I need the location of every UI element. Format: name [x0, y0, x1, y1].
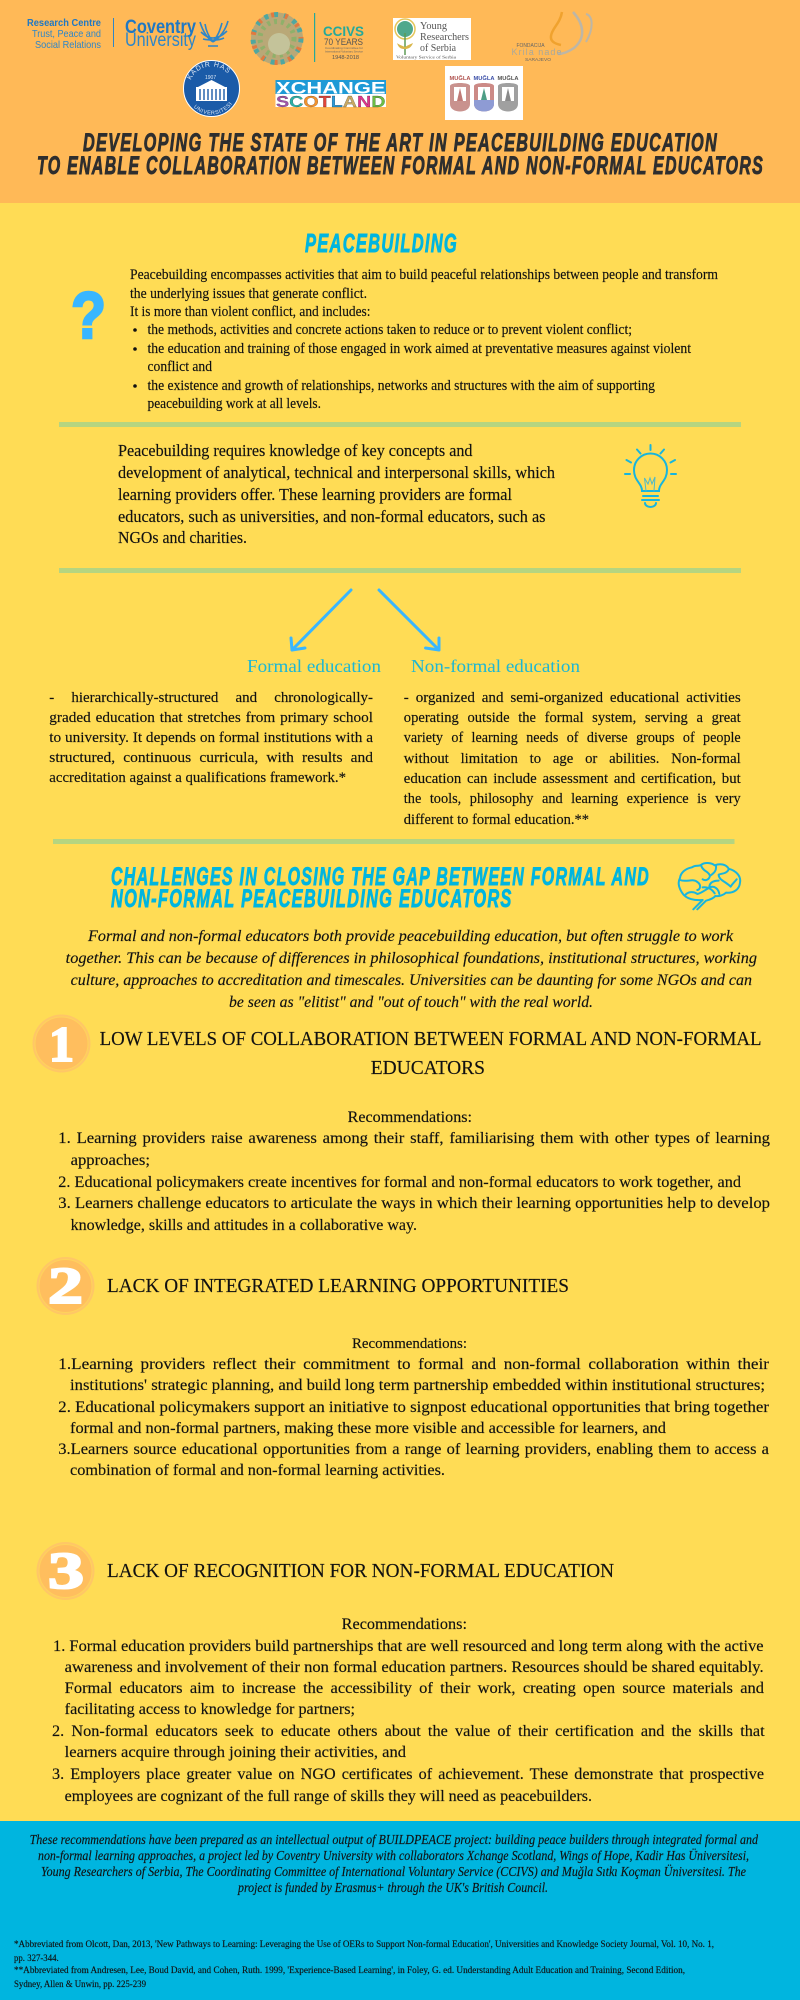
- list: recommendations 3: [52, 1638, 765, 1805]
- subheading: recommendations 3: Recommendations:: [342, 1616, 467, 1633]
- list: recommendations 1: 3. Learners challenge educators to articulate the ways in which their learning opportunities help to develop: [58, 1195, 770, 1212]
- text block: non-formal education description: variety of learning needs of diverse groups of people: [404, 730, 741, 746]
- text block: learning providers: NGOs and charities.: [118, 528, 247, 547]
- text block: definition: the methods, activities and concrete actions taken to reduce or to prevent violent conflict;: [148, 322, 632, 338]
- title: [37, 129, 764, 180]
- list: recommendations 3: 3. Employers place greater value on NGO certificates of achievement. These demonstrate that prospective: [52, 1766, 764, 1783]
- panel: footer: [0, 1821, 800, 2000]
- logo: Coventry University research centre: Trust, Peace and: [32, 28, 101, 40]
- logo: Young Researchers of Serbia: of Serbia: [420, 42, 456, 54]
- text block: non-formal education description: the tools, philosophy and learning experience is very: [404, 791, 741, 807]
- text block: definition: It is more than violent conflict, and includes:: [130, 304, 370, 320]
- list: recommendations 3: learners acquire through joining their activities, and: [65, 1744, 406, 1761]
- panel: challenge 1: [32, 1014, 770, 1234]
- list: recommendations 3: facilitating access to knowledge for partners;: [65, 1701, 355, 1718]
- text block: references: [14, 1939, 714, 1990]
- badge: number 2: 2: [48, 1258, 83, 1315]
- heading: challenge 1: LOW LEVELS OF COLLABORATION BETWEEN FORMAL AND NON-FORMAL: [100, 1028, 762, 1050]
- logo: Young Researchers of Serbia: Voluntary Service of Serbia: [396, 54, 456, 60]
- subheading: recommendations 1: Recommendations:: [348, 1109, 472, 1126]
- text block: definition: the education and training of those engaged in work aimed at preventative measures against violent: [148, 341, 691, 357]
- list: recommendations 2: institutions' strategic planning, and build long term partnership embedded within institutional structures;: [70, 1377, 765, 1394]
- list: recommendations 3: 2. Non-formal educators seek to educate others about the value of their certification and the skills that: [52, 1723, 765, 1740]
- panel: peacebuilding definition: [71, 228, 719, 412]
- text block: non-formal education description: different to formal education.**: [404, 812, 589, 828]
- list: recommendations 2: combination of formal and non-formal learning activities.: [70, 1462, 445, 1479]
- logo: Mugla: MUĞLA: [474, 74, 495, 82]
- text block: references: Sydney, Allen & Unwin, pp. 225-239: [14, 1980, 146, 1990]
- text block: non-formal education description: operating outside the formal system, serving a great: [404, 710, 741, 726]
- text block: definition: the underlying issues that generate conflict.: [130, 286, 367, 302]
- text block: learning providers: Peacebuilding requires knowledge of key concepts and: [118, 441, 473, 460]
- text block: learning providers: development of analytical, technical and interpersonal skills, which: [118, 463, 556, 482]
- logo: Mugla: [445, 66, 523, 120]
- text block: challenges intro: culture, approaches to accreditation and timescales. Universities can be daunting for some NGOs and can: [71, 972, 752, 989]
- logo: Xchange Scotland: XCHANGE: [276, 78, 386, 98]
- logo: CCIVS 70 years: International Voluntary Service: [325, 50, 363, 54]
- logo: CCIVS 70 years: 70 YEARS: [324, 37, 363, 47]
- text block: non-formal education description: [404, 690, 741, 828]
- logo: Mugla: MUĞLA: [450, 74, 471, 82]
- badge: number 3: 3: [48, 1543, 84, 1600]
- list: recommendations 3: 1. Formal education providers build partnerships that are well resourced and long term along with the active: [53, 1638, 764, 1655]
- badge: number 3: [36, 1542, 94, 1600]
- logo: Coventry University research centre: Research Centre: [27, 17, 101, 29]
- logo: Kadir Has University: 1907: [205, 75, 216, 81]
- heading: peacebuilding: PEACEBUILDING: [305, 228, 458, 258]
- arrow: to formal education: [291, 590, 351, 650]
- logo: CCIVS 70 years: CCIVS: [323, 23, 364, 39]
- badge: number 2: [36, 1257, 94, 1315]
- heading: challenges: NON-FORMAL PEACEBUILDING EDUCATORS: [111, 885, 513, 913]
- text block: definition: peacebuilding work at all levels.: [148, 396, 321, 412]
- text block: project statement: [30, 1832, 758, 1895]
- heading: challenge 3: LACK OF RECOGNITION FOR NON-FORMAL EDUCATION: [107, 1560, 614, 1582]
- heading: formal education: Formal education: [247, 656, 381, 676]
- text block: definition: [130, 267, 719, 412]
- logo: Coventry University research centre: Coventry: [125, 17, 196, 38]
- text block: formal education description: to university. It depends on formal institutions with a: [49, 730, 374, 746]
- icon: question mark: ?: [71, 278, 106, 352]
- logo: Fondacija Krila nade: Krila nade: [512, 47, 562, 57]
- panel: challenge 3: [36, 1542, 765, 1805]
- text block: formal education description: - hierarchically-structured and chronologically-: [49, 690, 373, 706]
- list: recommendations 1: approaches;: [71, 1152, 150, 1169]
- text block: challenges intro: together. This can be because of differences in philosophical foundations, institutional structures, working: [66, 950, 757, 967]
- list: recommendations 2: 2. Educational policymakers support an initiative to signpost educational opportunities that bring together: [58, 1399, 770, 1416]
- text block: project statement: project is funded by Erasmus+ through the UK's British Council.: [237, 1880, 548, 1895]
- text block: non-formal education description: - organized and semi-organized educational activities: [404, 690, 741, 706]
- text block: definition: the existence and growth of relationships, networks and structures with the aim of supporting: [148, 378, 655, 394]
- text block: non-formal education description: education can include assessment and certification, but: [404, 771, 741, 787]
- logo: Coventry University research centre: [27, 17, 228, 51]
- text block: non-formal education description: without limitation to age or abilities. Non-formal: [404, 751, 741, 767]
- panel: challenges intro: [66, 863, 757, 1011]
- logo: Young Researchers of Serbia: Researchers: [420, 31, 469, 43]
- heading: challenge 2: LACK OF INTEGRATED LEARNING OPPORTUNITIES: [107, 1275, 569, 1297]
- list: recommendations 1: [58, 1130, 770, 1234]
- arrow: to non-formal education: [379, 590, 439, 650]
- logo: Coventry University research centre: University: [125, 30, 196, 51]
- icon: brain: [679, 863, 740, 909]
- list: recommendations 3: employees are cognizant of the full range of skills they will need as peacebuilders.: [65, 1788, 592, 1805]
- heading: challenge 1: [100, 1028, 762, 1079]
- heading: non-formal education: Non-formal education: [411, 656, 580, 676]
- text block: challenges intro: be seen as "elitist" and "out of touch" with the real world.: [229, 994, 593, 1011]
- list: recommendations 1: 2. Educational policymakers create incentives for formal and non-formal educators to work together, and: [58, 1174, 741, 1191]
- text block: references: pp. 327-344.: [14, 1954, 59, 1964]
- text block: challenges intro: [66, 928, 757, 1011]
- list: recommendations 1: knowledge, skills and attitudes in a collaborative way.: [71, 1217, 417, 1234]
- list: recommendations 1: 1. Learning providers raise awareness among their staff, familiarising them with other types of learning: [58, 1130, 770, 1147]
- logo: Fondacija Krila nade: SARAJEVO: [525, 57, 552, 62]
- text block: formal education description: structured, continuous curricula, with results and: [49, 750, 374, 766]
- text block: references: *Abbreviated from Olcott, Dan, 2013, 'New Pathways to Learning: Leveraging the Use of OERs to Support Non-formal Education', Universities and Knowledge Society Journal, Vol. 10, No. 1,: [14, 1939, 714, 1950]
- text block: learning providers: educators, such as universities, and non-formal educators, such as: [118, 507, 546, 526]
- text block: formal education description: accreditation against a qualifications framework.*: [49, 770, 346, 786]
- text block: definition: conflict and: [148, 359, 213, 375]
- text block: challenges intro: Formal and non-formal educators both provide peacebuilding education, but often struggle to work: [87, 928, 734, 945]
- text block: learning providers: learning providers offer. These learning providers are formal: [118, 485, 512, 504]
- logo: Mugla: MUĞLA: [498, 74, 519, 82]
- panel: formal vs non-formal: [49, 590, 741, 828]
- logo: Coventry University research centre: Social Relations: [35, 39, 101, 51]
- panel: header band: [0, 0, 800, 203]
- text block: references: **Abbreviated from Andresen, Lee, Boud David, and Cohen, Ruth. 1999, 'Experience-Based Learning', in Foley, G. ed. Understanding Adult Education and Training, Second Edition,: [14, 1965, 685, 1976]
- list: recommendations 3: awareness and involvement of their non formal education partners. Resources should be shared equitably.: [65, 1659, 764, 1676]
- badge: number 1: [32, 1014, 90, 1072]
- text block: definition: Peacebuilding encompasses activities that aim to build peaceful relationships between people and transform: [130, 267, 719, 283]
- subheading: recommendations 2: Recommendations:: [352, 1336, 467, 1352]
- logo: Young Researchers of Serbia: [393, 18, 471, 60]
- text block: learning providers: [118, 441, 556, 547]
- icon: light bulb: [625, 445, 676, 507]
- logo: Young Researchers of Serbia: Young: [420, 20, 447, 32]
- text block: formal education description: graded education that stretches from primary school: [49, 710, 373, 726]
- heading: challenges: [111, 863, 650, 913]
- list: recommendations 2: 3.Learners source educational opportunities from a range of learning providers, enabling them to access a: [58, 1441, 769, 1458]
- logo: Xchange Scotland: SCOTLAND: [276, 94, 386, 111]
- logo: CCIVS 70 years: 1948-2018: [332, 55, 359, 61]
- panel: challenge 2: [36, 1257, 770, 1479]
- logo: Fondacija Krila nade: FONDACIJA: [516, 43, 545, 49]
- badge: number 1: 1: [49, 1016, 74, 1072]
- logo: Kadir Has University: [183, 60, 240, 117]
- list: recommendations 3: Formal educators aim to increase the accessibility of their work, creating open source materials and: [65, 1680, 764, 1697]
- list: recommendations 2: formal and non-formal partners, making these more visible and accessible for learners, and: [70, 1420, 666, 1437]
- logo: Xchange Scotland: [276, 78, 386, 111]
- logo: Kadir Has University: KADIR HAS: [186, 62, 230, 80]
- logo: Kadir Has University: UNIVERSITESI: [194, 102, 232, 115]
- panel: learning providers: [118, 441, 676, 547]
- logo: CCIVS 70 years: Coordinating Committee for: [325, 46, 363, 50]
- heading: challenge 1: EDUCATORS: [371, 1057, 485, 1079]
- list: recommendations 2: [58, 1356, 770, 1479]
- text block: formal education description: [49, 690, 374, 786]
- logo: Fondacija Krila nade: [512, 12, 592, 62]
- list: recommendations 2: 1.Learning providers reflect their commitment to formal and non-formal collaboration within their: [58, 1356, 770, 1373]
- logo: CCIVS 70 years: [251, 12, 364, 64]
